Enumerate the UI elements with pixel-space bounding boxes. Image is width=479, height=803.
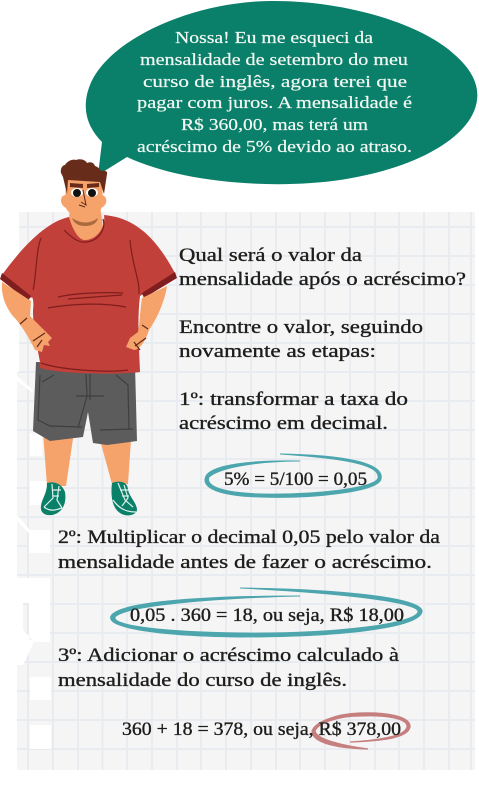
step 3 result with red circle: 360 + 18 = 378, ou seja, R$ 378,00 <box>122 720 401 740</box>
ears <box>61 195 106 208</box>
step 2 text <box>58 528 440 573</box>
question text: Qual será o valor da <box>179 246 362 266</box>
speech text: pagar com juros. A mensalidade é <box>137 93 412 112</box>
speech text: acréscimo de 5% devido ao atraso. <box>137 137 412 156</box>
hand lines <box>20 318 148 350</box>
step 2 text: mensalidade antes de fazer o acréscimo. <box>58 553 432 573</box>
head <box>61 159 107 226</box>
speech text: Nossa! Eu me esqueci da <box>175 28 374 47</box>
step 2 text: 2º: Multiplicar o decimal 0,05 pelo valor da <box>58 528 440 548</box>
step 1 text <box>179 390 408 434</box>
instruction text: novamente as etapas: <box>179 342 376 362</box>
question text <box>179 246 466 290</box>
speech text: curso de inglês, agora terei que <box>143 72 407 91</box>
speech text: mensalidade de setembro do meu <box>140 50 409 69</box>
speech bubble <box>86 1 477 184</box>
neck <box>68 205 104 243</box>
speech text: R$ 360,00, mas terá um <box>181 115 368 134</box>
shorts <box>33 362 137 445</box>
left arm <box>2 282 52 352</box>
question text: mensalidade após o acréscimo? <box>179 270 466 290</box>
step 3 text: 3º: Adicionar o acréscimo calculado à <box>58 646 399 666</box>
step 1 formula with teal circle <box>205 454 381 497</box>
step 1 formula with teal circle: 5% = 5/100 = 0,05 <box>224 470 367 490</box>
panel: grid paper <box>0 212 475 770</box>
step 3 result with red circle <box>122 713 410 749</box>
shirt <box>0 215 177 374</box>
step 3 text <box>58 646 399 691</box>
legs <box>43 432 131 486</box>
instruction text <box>179 318 423 362</box>
right arm <box>126 286 167 350</box>
instruction text: Encontre o valor, seguindo <box>179 318 423 338</box>
step 1 text: acréscimo em decimal. <box>179 414 388 434</box>
shoes <box>41 482 137 515</box>
step 3 text: mensalidade do curso de inglês. <box>58 671 347 691</box>
character: man with red shirt <box>0 159 177 515</box>
step 1 text: 1º: transformar a taxa do <box>179 390 408 410</box>
step 2 formula with teal circle: 0,05 . 360 = 18, ou seja, R$ 18,00 <box>130 606 404 626</box>
step 2 formula with teal circle <box>111 588 422 637</box>
speech text <box>137 28 412 156</box>
